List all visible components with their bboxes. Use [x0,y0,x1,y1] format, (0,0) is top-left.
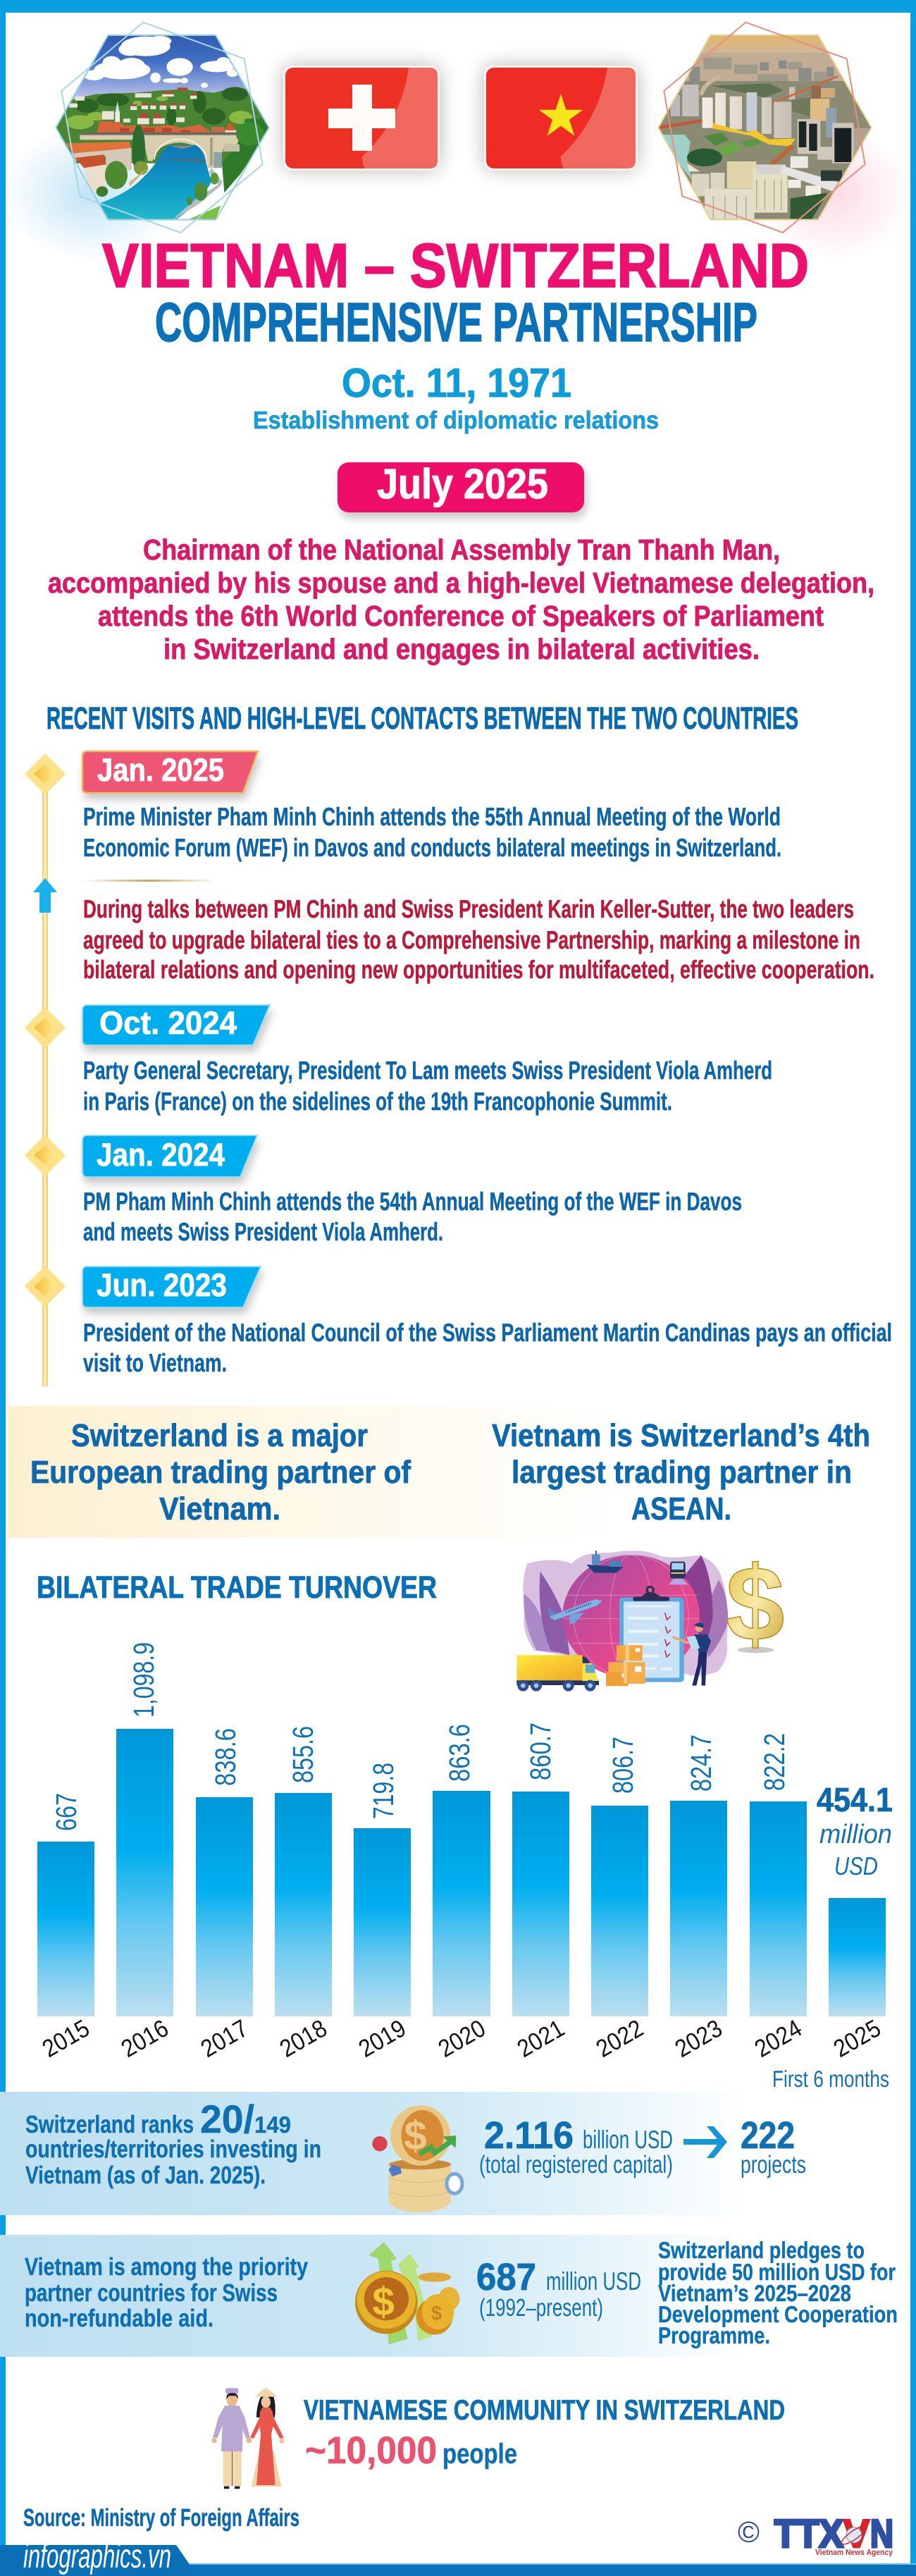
date tag: Oct. 2024 [99,1004,237,1041]
icon: coin and growth arrow [372,2105,462,2212]
year labels: 2019 [354,2014,411,2063]
value labels: 1,098.9 [128,1642,160,1718]
illustration: global logistics [516,1551,774,1691]
glow: blue lower left of header [4,127,180,261]
person [672,1622,711,1686]
footer band [0,2563,916,2576]
figure: non-refundable aid: million USD [546,2267,641,2295]
panel: investment [0,2092,806,2215]
icon: gold dollar sign: $ [726,1544,784,1663]
statement: Vietnam as partner: Vietnam is Switzerland’s 4th [492,1417,870,1453]
value labels: 863.6 [443,1724,476,1782]
icon: coin and growth arrow: $ [404,2113,427,2159]
year labels: 2017 [196,2014,253,2063]
text: ranking: 149 [254,2112,291,2138]
callout: 454.1 million USD: USD [834,1851,878,1880]
plane [547,1599,602,1624]
title: VIETNAM – SWITZERLAND [102,230,809,300]
badge: July 2025: July 2025 [377,460,548,507]
shadow under dollar [737,1647,774,1653]
text: ranking: 20/ [200,2097,254,2141]
heading: Vietnamese community: VIETNAMESE COMMUNITY IN SWITZERLAND [304,2395,785,2426]
text block: and meets Swiss President Viola Amherd. [83,1217,443,1246]
boxes [606,1645,645,1686]
text: development pledge: Programme. [658,2322,770,2348]
statement: Vietnam as partner: largest trading partner in [512,1454,852,1490]
text: ranking [25,2097,321,2189]
figure: community size [305,2429,517,2472]
value labels: 838.6 [209,1728,242,1786]
text: priority partner: partner countries for Swiss [25,2279,278,2307]
year labels: 2021 [513,2014,569,2063]
text block [83,1056,772,1116]
logo: TTXVN: N [870,2511,893,2556]
icon: gold coins and arrows: $ [431,2302,442,2324]
train [669,1562,688,1584]
note: first 6 months: First 6 months [772,2066,889,2092]
year labels: 2023 [671,2014,727,2063]
icon: gold coins and arrows: $ [372,2279,395,2324]
date tag: Jan. 2025 [97,751,224,788]
bar chart: trade turnover [37,1642,893,2092]
statement: Vietnam as partner: ASEAN. [631,1491,731,1527]
badge: July 2025 [338,460,584,512]
text: ranking: ountries/territories investing in [25,2136,321,2163]
year labels [38,2014,886,2063]
timeline spine [42,774,48,1386]
icon: gold diamond marker [25,1007,66,1049]
date: establishment of relations: Oct. 11, 1971 [342,360,571,406]
text: ranking: Switzerland ranks [25,2111,194,2138]
text: ranking: Vietnam (as of Jan. 2025). [25,2162,266,2189]
icon: Vietnamese couple in traditional dress [211,2387,285,2489]
date tag [82,1004,270,1045]
icon: gold coins and arrows [355,2242,459,2345]
figure: non-refundable aid: 687 [476,2256,536,2298]
panel: trade partners [8,1406,870,1538]
text: development pledge [658,2237,898,2348]
text: priority partner: Vietnam is among the priority [25,2253,308,2281]
icon: gold diamond marker [25,753,66,795]
statement: Switzerland as partner: Vietnam. [159,1491,280,1527]
intro paragraph: in Switzerland and engages in bilateral activities. [163,633,760,665]
figure: community size: people [442,2439,517,2470]
text: development pledge: Vietnam’s 2025–2028 [658,2280,851,2306]
clipboard [619,1586,684,1682]
statement: Switzerland as partner [30,1417,411,1527]
timeline item: Oct. 2024 [25,1004,772,1116]
timeline item: Jun. 2023 [25,1266,892,1377]
value labels: 860.7 [524,1723,557,1780]
callout: 454.1 million USD [817,1782,893,1880]
intro paragraph [48,534,874,665]
arrow: upgrade to partnership [33,878,57,913]
year labels: 2018 [275,2014,332,2063]
figure: community size: ~10,000 [305,2429,437,2472]
figure: non-refundable aid: (1992–present) [479,2294,603,2322]
logo: TTXVN: Vietnam News Agency [815,2549,893,2557]
year labels: 2015 [38,2014,94,2063]
callout: 454.1 million USD: 454.1 [817,1782,893,1819]
logo: TTXVN [738,2511,893,2557]
figure: registered capital [479,2114,673,2178]
logo: TTXVN: © [738,2515,760,2549]
statement: Vietnam as partner [492,1417,870,1527]
text block [83,1187,742,1246]
text: priority partner [25,2253,308,2332]
bars [37,1729,886,2016]
figure: projects: 222 [741,2114,795,2157]
timeline item: Jan. 2024 [25,1135,742,1246]
photo: Ho Chi Minh City skyline hexagon [652,23,877,233]
value labels: 806.7 [607,1737,639,1794]
date tag: Jan. 2024 [97,1136,225,1173]
text block [83,1318,892,1377]
year labels: 2025 [829,2014,886,2063]
intro paragraph: attends the 6th World Conference of Speakers of Parliament [98,600,824,632]
figure: projects: projects [741,2151,806,2178]
text block: in Paris (France) on the sidelines of the 19th Francophonie Summit. [83,1087,672,1116]
timeline item: Jan. 2025 [25,751,781,862]
figure: registered capital: billion USD [583,2125,673,2154]
value labels: 822.2 [758,1733,791,1791]
text: development pledge: Switzerland pledges to [658,2237,865,2263]
year labels: 2024 [750,2014,807,2063]
logo: TTXVN: V [843,2511,869,2556]
caption: establishment of diplomatic relations: Establishment of diplomatic relations [253,407,659,434]
value labels: 824.7 [685,1734,717,1792]
icon: gold diamond marker [25,1135,66,1176]
flag: Vietnam [484,66,638,171]
value labels: 855.6 [287,1726,319,1783]
text block: visit to Vietnam. [83,1348,227,1377]
year labels: 2022 [592,2014,648,2063]
footer tag: infographics.vn: infographics.vn [23,2538,171,2575]
icon: gold diamond marker [25,1266,66,1307]
source: Source: Ministry of Foreign Affairs [23,2504,299,2532]
year labels: 2020 [434,2014,490,2063]
value labels [50,1642,791,1831]
arrow [683,2126,727,2158]
value labels: 719.8 [367,1763,400,1819]
text block [83,802,781,862]
callout: 454.1 million USD: million [819,1820,892,1849]
year labels: 2016 [117,2014,173,2063]
statement: Switzerland as partner: Switzerland is a major [71,1417,368,1453]
logo: TTXVN: TTX [774,2511,843,2556]
section heading: trade turnover: BILATERAL TRADE TURNOVER [37,1570,437,1605]
text: priority partner: non-refundable aid. [25,2305,213,2332]
footer tag: infographics.vn [0,2538,190,2576]
figure: non-refundable aid [476,2256,641,2322]
highlighted text block [83,894,874,984]
statement: Switzerland as partner: European trading partner of [30,1454,411,1490]
figure: projects [741,2114,806,2178]
figure: registered capital: (total registered capital) [479,2151,673,2178]
glow: pink lower right of header [757,127,912,261]
figure: registered capital: 2.116 [484,2114,574,2157]
ship [586,1551,623,1573]
flag: Switzerland [283,66,440,171]
intro paragraph: Chairman of the National Assembly Tran Thanh Man, [143,534,780,566]
value labels: 667 [50,1793,82,1831]
truck [516,1655,599,1691]
panel: non-refundable aid [0,2235,898,2357]
photo: Bern bridge hexagon [49,23,275,233]
date tag: Jun. 2023 [97,1267,227,1303]
